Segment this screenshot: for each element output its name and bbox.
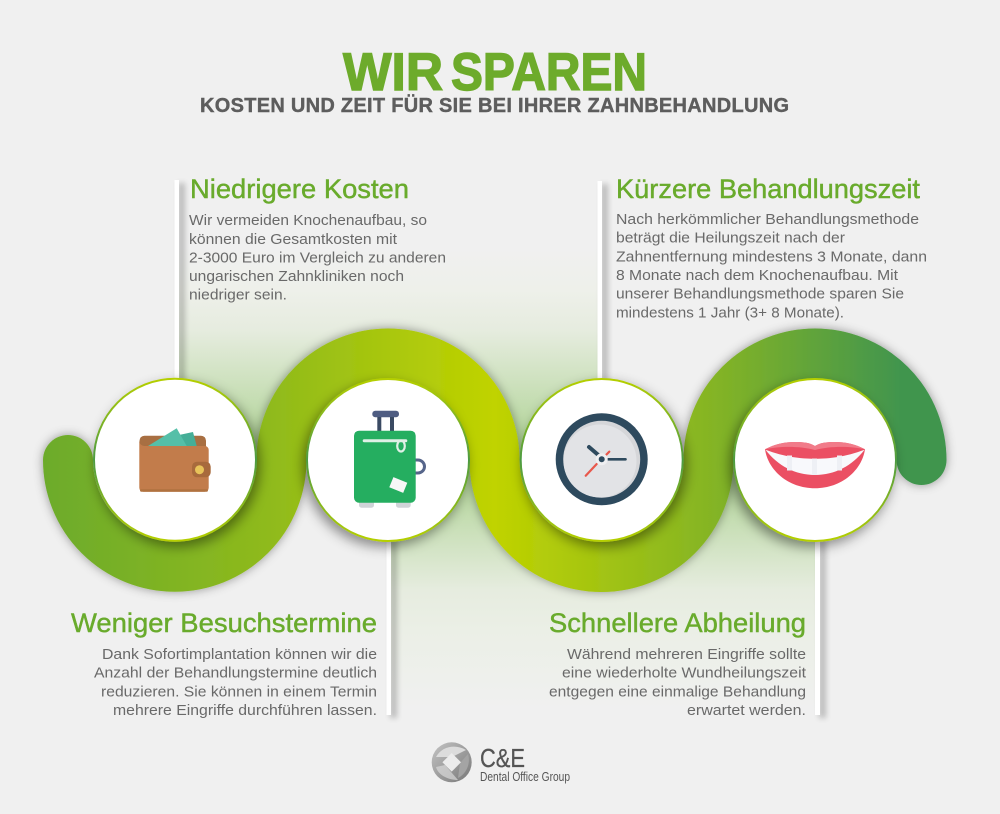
connector bar: Weniger Besuchstermine [386,540,397,718]
circle: smile [734,379,896,541]
body: Kürzere Behandlungszeit: beträgt die Heilungszeit nach der [616,230,845,246]
heading: Kürzere Behandlungszeit: Kürzere Behandlungszeit [616,174,920,204]
connector bar: Niedrigere Kosten [174,180,185,383]
body: Kürzere Behandlungszeit [616,212,927,322]
logo: C&E Dental Office Group [432,742,570,784]
heading: Weniger Besuchstermine: Weniger Besuchstermine [71,608,377,638]
body: Schnellere Abheilung: erwartet werden. [687,703,806,719]
text block: Kürzere Behandlungszeit [616,174,927,322]
text block: Schnellere Abheilung [549,608,806,719]
logo tagline: Dental Office Group [480,770,570,784]
body: Kürzere Behandlungszeit: 8 Monate nach dem Knochenaufbau. Mit [616,268,898,284]
body: Weniger Besuchstermine [94,647,377,719]
body: Niedrigere Kosten: niedriger sein. [189,288,287,304]
circle: suitcase [307,379,469,541]
text block: Weniger Besuchstermine [71,608,377,719]
connector bar: Kürzere Behandlungszeit [598,181,608,384]
circle: wallet [94,379,256,541]
body: Kürzere Behandlungszeit: Zahnentfernung mindestens 3 Monate, dann [616,250,927,266]
icon: clock [556,413,648,505]
icon: smile [765,442,865,488]
heading: Schnellere Abheilung: Schnellere Abheilung [549,608,806,638]
logo name: C&E [480,743,525,773]
logo mark [432,742,472,782]
body: Schnellere Abheilung: eine wiederholte Wundheilungszeit [562,666,806,682]
body: Weniger Besuchstermine: Anzahl der Behandlungstermine deutlich [94,666,377,682]
body: Niedrigere Kosten [189,213,446,304]
body: Niedrigere Kosten: 2-3000 Euro im Vergleich zu anderen [189,250,446,266]
body: Weniger Besuchstermine: Dank Sofortimplantation können wir die [102,647,377,663]
text block: Niedrigere Kosten [189,174,446,304]
body: Niedrigere Kosten: Wir vermeiden Knochenaufbau, so [189,213,427,229]
body: Kürzere Behandlungszeit: Nach herkömmlicher Behandlungsmethode [616,212,919,228]
connector bar: Schnellere Abheilung [815,540,826,718]
icon: wallet [139,428,211,492]
body: Schnellere Abheilung: Während mehreren Eingriffe sollte [567,647,806,663]
title: SPAREN [451,43,647,102]
title: WIR [343,43,443,102]
wavy ribbon [68,353,922,567]
body: Schnellere Abheilung: entgegen eine einmalige Behandlung [549,684,806,700]
title [343,43,647,102]
body: Schnellere Abheilung [549,647,806,719]
lower green glow panel [391,460,815,710]
body: Kürzere Behandlungszeit: unserer Behandlungsmethode sparen Sie [616,286,904,302]
body: Niedrigere Kosten: ungarischen Zahnkliniken noch [189,269,404,285]
body: Kürzere Behandlungszeit: mindestens 1 Jahr (3+ 8 Monate). [616,306,844,322]
body: Weniger Besuchstermine: reduzieren. Sie können in einem Termin [101,684,377,700]
subtitle: KOSTEN UND ZEIT FÜR SIE BEI IHRER ZAHNBEHANDLUNG [200,94,789,117]
icon: suitcase [354,411,424,508]
body: Niedrigere Kosten: können die Gesamtkosten mit [189,232,397,248]
heading: Niedrigere Kosten: Niedrigere Kosten [190,174,409,204]
body: Weniger Besuchstermine: mehrere Eingriffe durchführen lassen. [113,703,377,719]
upper green glow panel [179,210,598,460]
circle: clock [521,379,683,541]
